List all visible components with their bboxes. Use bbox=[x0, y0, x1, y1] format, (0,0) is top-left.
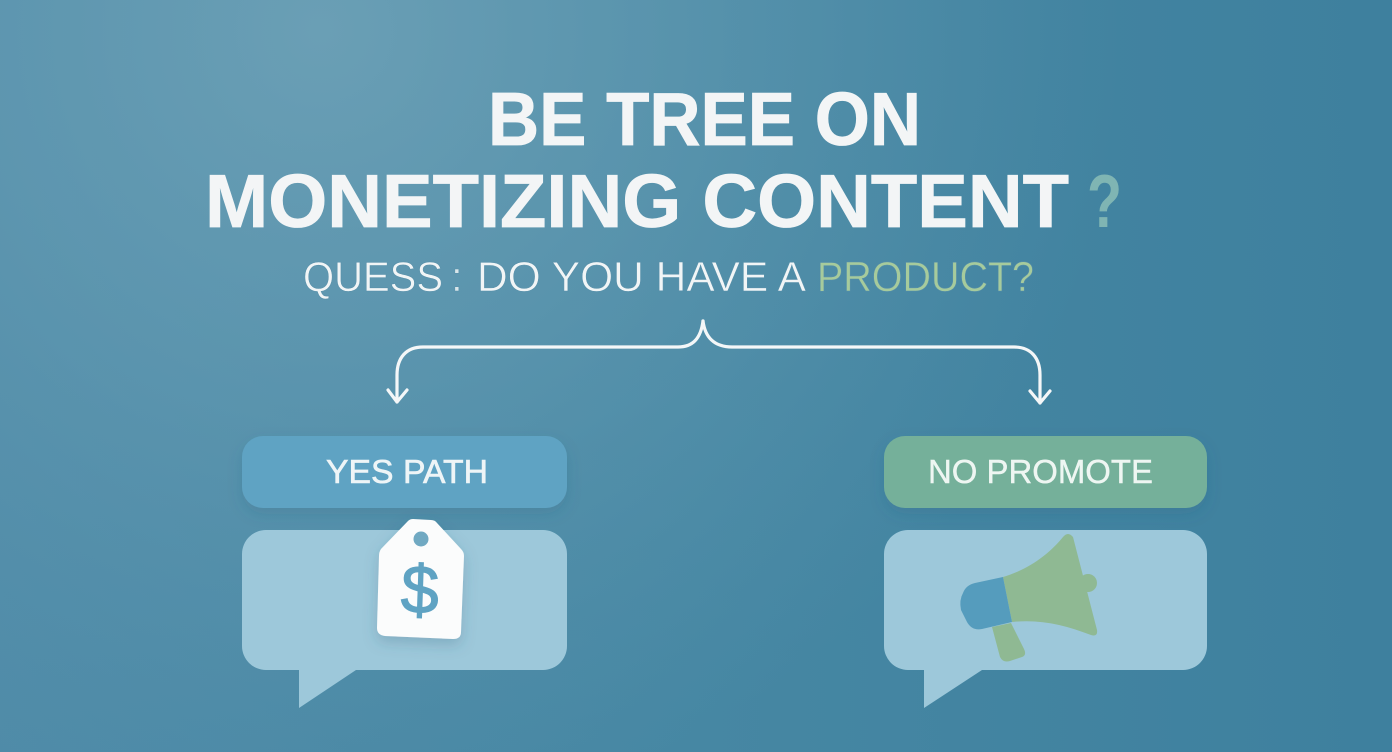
title bbox=[205, 77, 1122, 243]
no label: NO PROMOTE bbox=[928, 453, 1153, 490]
subtitle word: product: PRODUCT? bbox=[817, 253, 1034, 300]
yes label: YES PATH bbox=[326, 453, 488, 490]
title line 1: BE TREE ON bbox=[488, 77, 921, 161]
subtitle word: quess: QUESS bbox=[303, 253, 443, 300]
icon: price tag bbox=[377, 519, 464, 639]
no header pill bbox=[884, 436, 1207, 508]
title question mark: ? bbox=[1087, 159, 1122, 243]
arrow: right branch bbox=[703, 321, 1050, 403]
yes speech bubble bbox=[242, 530, 567, 708]
icon: megaphone bbox=[960, 534, 1097, 662]
branching arrows bbox=[388, 321, 1050, 403]
yes header pill bbox=[242, 436, 567, 508]
panel: no promote bbox=[884, 436, 1207, 708]
no speech bubble bbox=[884, 530, 1207, 708]
subtitle question bbox=[303, 253, 1034, 300]
arrow: left branch bbox=[388, 321, 703, 402]
subtitle colon: : bbox=[451, 253, 463, 300]
panel: yes path bbox=[242, 436, 567, 708]
title line 2: MONETIZING CONTENT bbox=[205, 159, 1069, 243]
subtitle words: DO YOU HAVE A bbox=[477, 253, 806, 300]
icon: price tag: $ bbox=[400, 551, 440, 629]
